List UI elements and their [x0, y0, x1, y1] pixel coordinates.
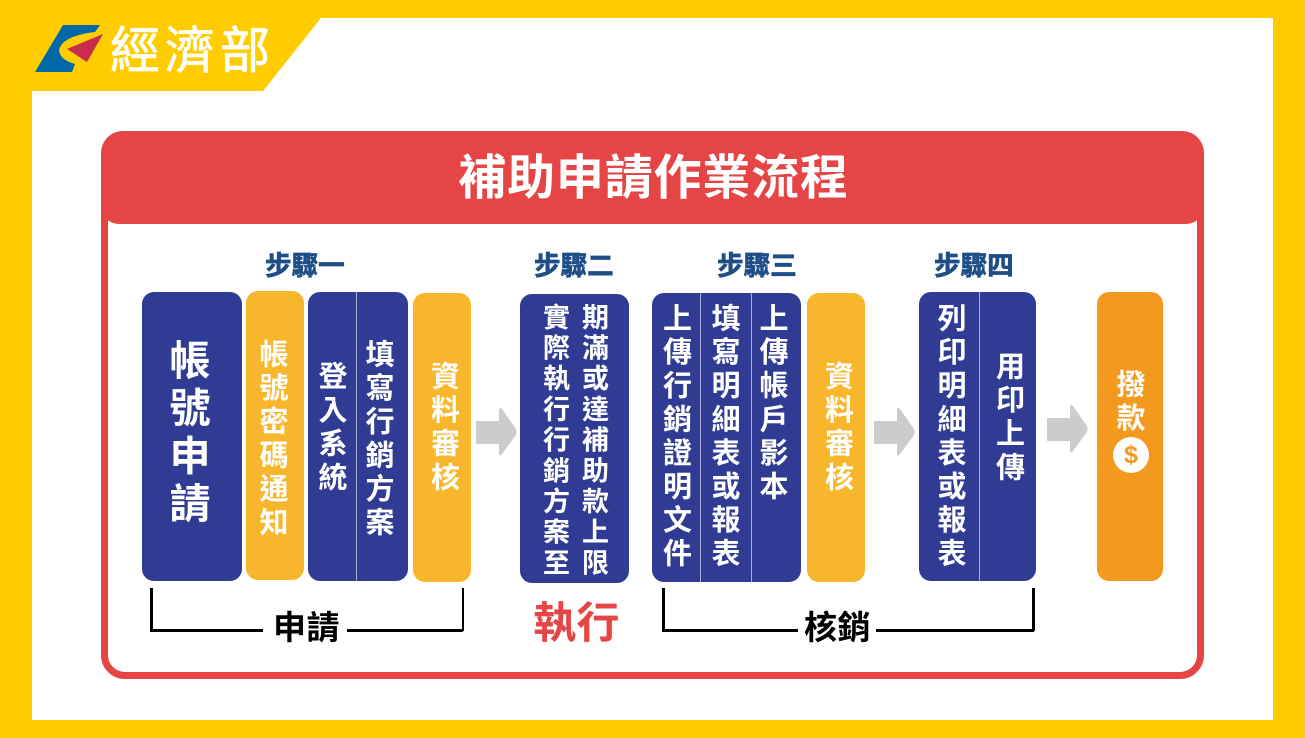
icon: dollar coin	[1113, 437, 1149, 473]
step 3 heading: 步驟三	[717, 251, 797, 281]
text: password notice: 帳號密碼通知	[255, 339, 287, 541]
text: payment: 撥款	[1112, 369, 1144, 436]
text: due or limit: 期滿或達補助款上限	[578, 303, 608, 579]
box: verification uploads	[652, 293, 801, 582]
text: print details: 列印明細表或報表	[933, 303, 965, 572]
text: stamp upload: 用印上傳	[992, 351, 1024, 485]
text: actual execution: 實際執行行銷方案至	[539, 303, 569, 579]
icon: ministry logo	[35, 25, 103, 72]
arrow 1	[476, 408, 516, 456]
step 1 heading: 步驟一	[265, 251, 345, 281]
text: fill plan: 填寫行銷方案	[361, 339, 393, 541]
box: password notice	[246, 291, 304, 580]
title band	[101, 131, 1204, 224]
text: data review 1: 資料審核	[426, 361, 458, 495]
text: upload proof: 上傳行銷證明文件	[658, 303, 690, 572]
step 2 heading: 步驟二	[534, 251, 614, 281]
box: print and upload	[919, 292, 1036, 581]
text: data review 2: 資料審核	[820, 361, 852, 495]
arrow 3	[1047, 405, 1088, 452]
bracket: application	[150, 588, 464, 632]
text: login: 登入系統	[314, 361, 346, 495]
box: login and fill plan	[308, 292, 408, 581]
step 4 heading: 步驟四	[934, 251, 1014, 281]
text: fill details: 填寫明細表或報表	[707, 303, 739, 572]
arrow 2	[874, 408, 914, 456]
panel: process frame	[101, 131, 1204, 679]
text: account application: 帳號申請	[163, 339, 209, 529]
text: upload bank copy: 上傳帳戶影本	[755, 303, 787, 505]
label: application: 申請	[273, 609, 340, 646]
box: data review 2	[807, 293, 865, 582]
box: payment	[1097, 292, 1163, 581]
box: execution	[520, 294, 629, 583]
label: execution: 執行	[533, 600, 620, 648]
header tab	[32, 18, 321, 91]
label: verification: 核銷	[804, 609, 871, 646]
title: 補助申請作業流程	[458, 152, 849, 205]
ministry name: 經濟部	[110, 23, 275, 79]
box: data review 1	[413, 293, 471, 582]
box: account application	[142, 292, 242, 581]
bracket: verification	[662, 588, 1035, 632]
icon: dollar coin: $	[1124, 441, 1138, 469]
